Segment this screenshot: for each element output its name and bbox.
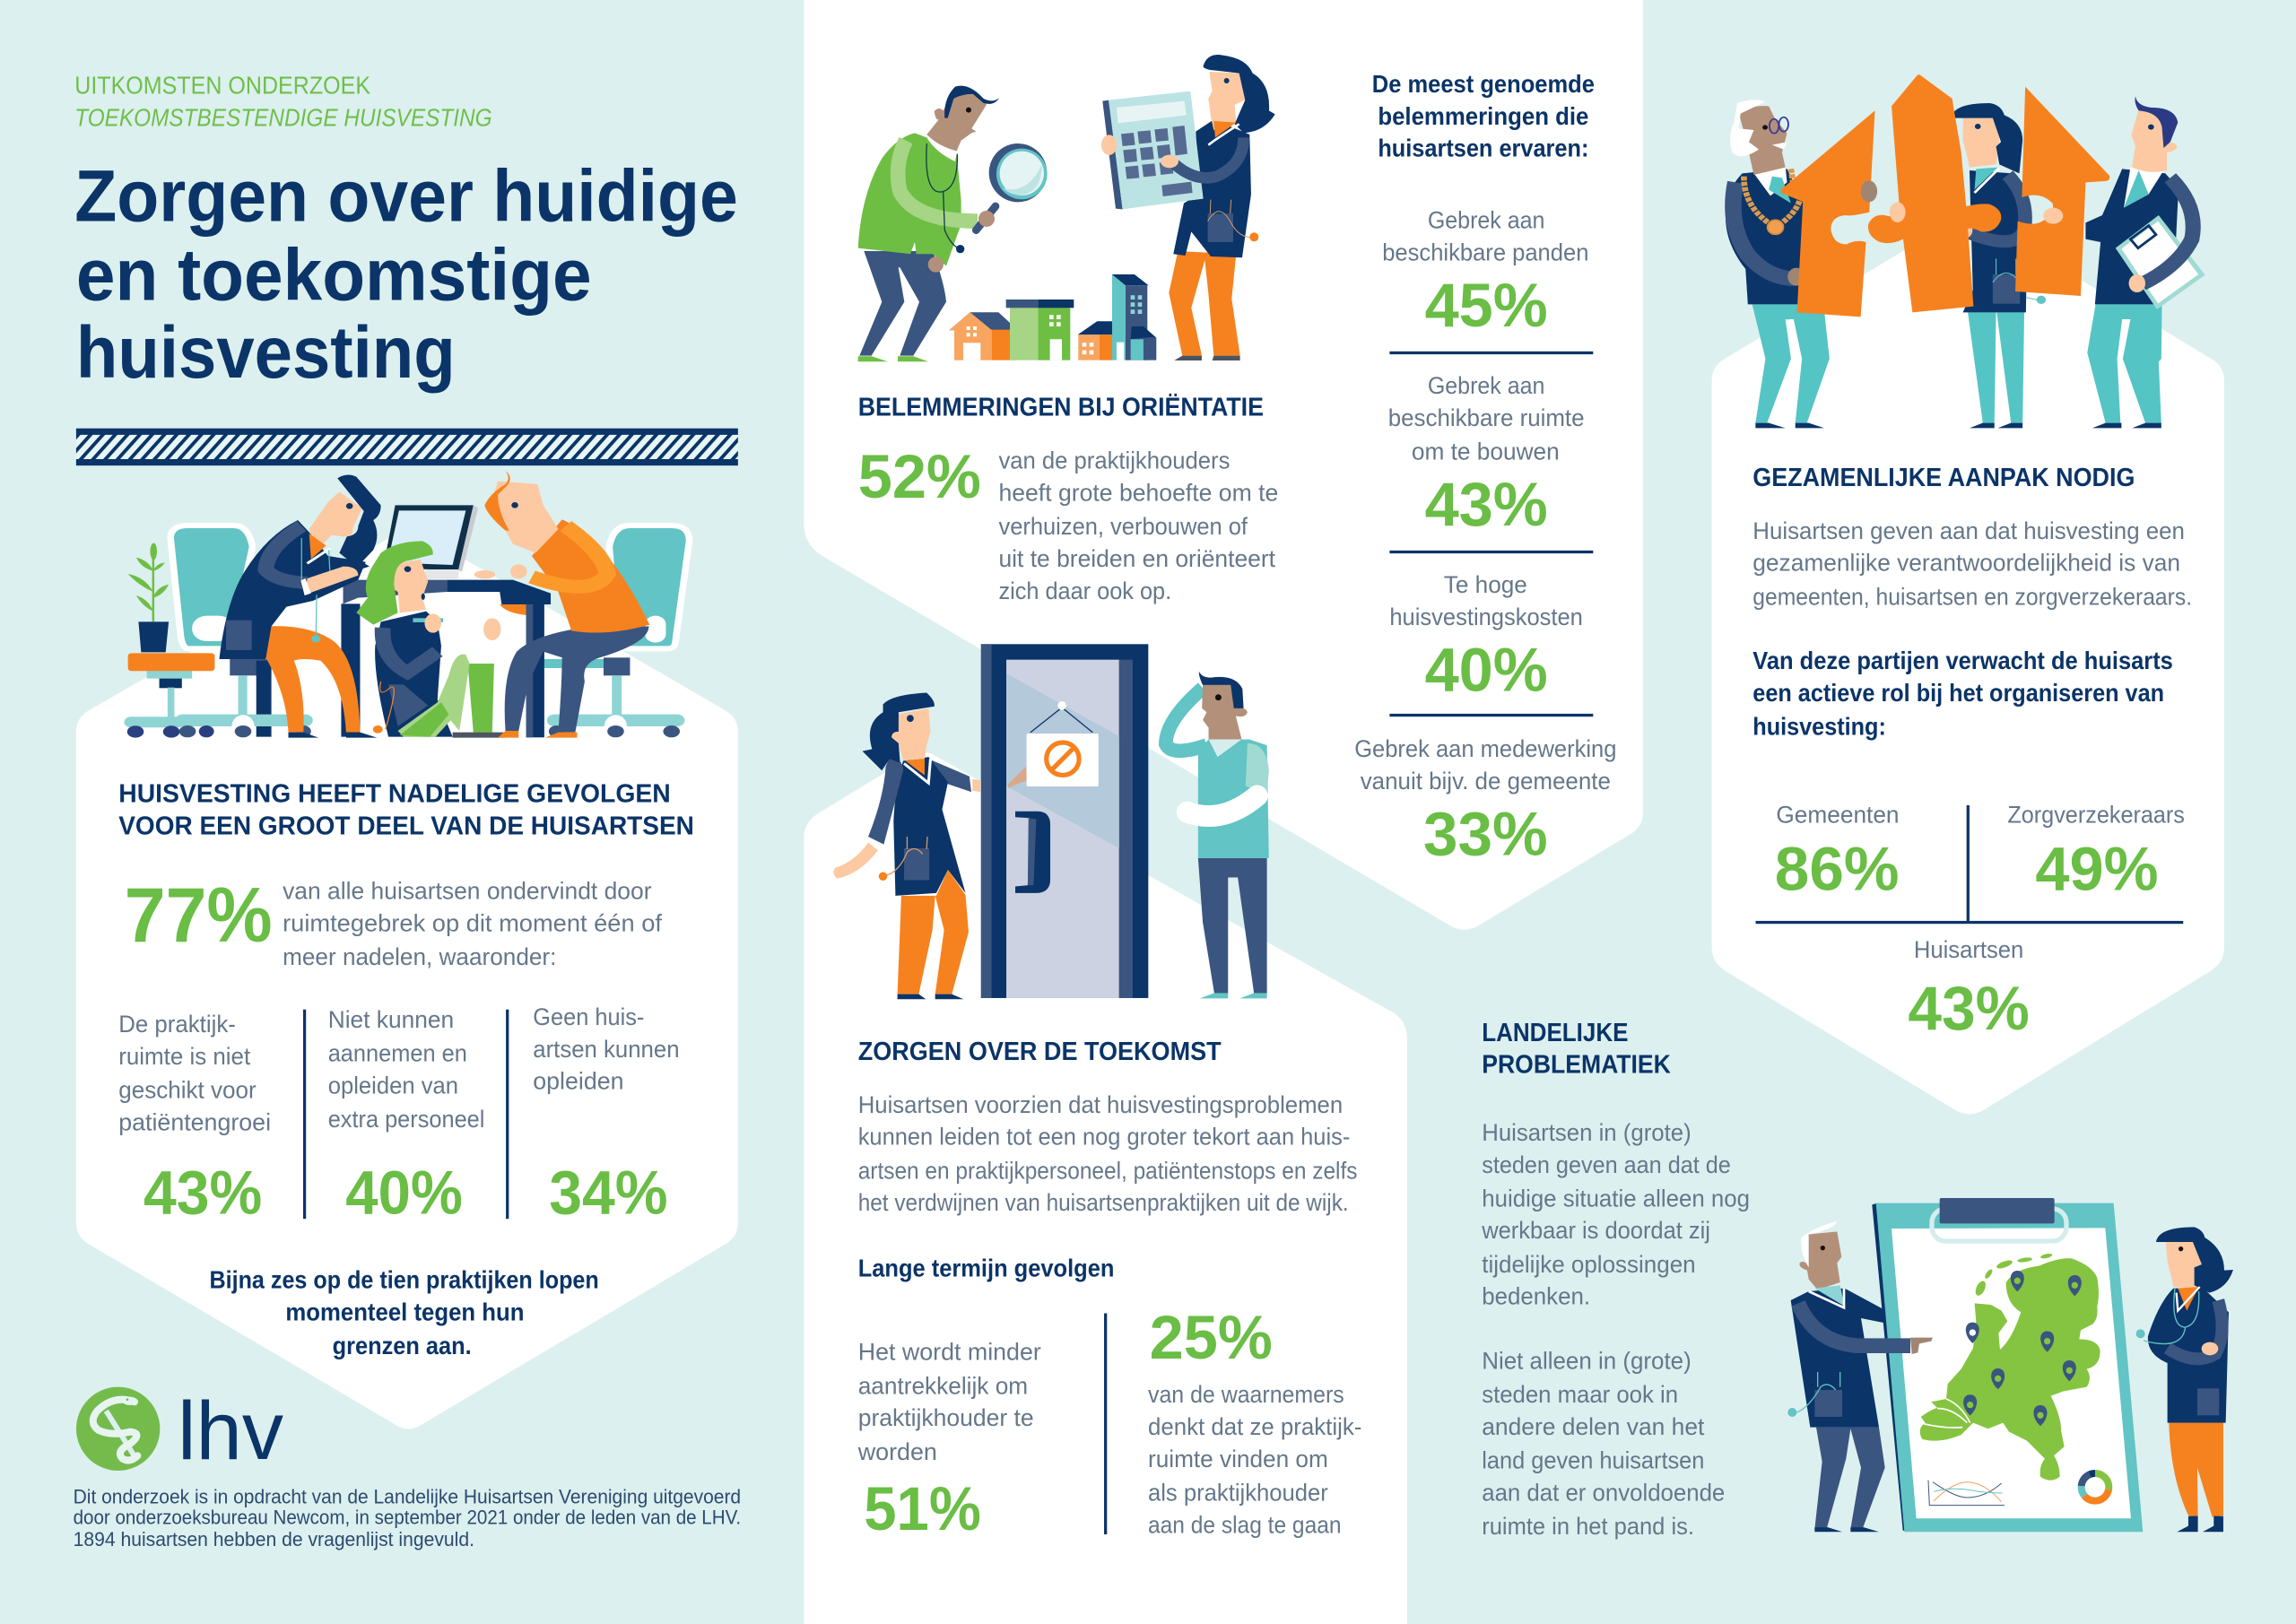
text: landelijke problematiek paragraphs: bedenken. [1482, 1283, 1590, 1310]
stat block: 51%: 51% [864, 1474, 981, 1543]
stat block: 25%: als praktijkhouder [1148, 1479, 1328, 1506]
person: man pointing at map [1787, 1221, 1933, 1532]
text: landelijke problematiek paragraphs [1481, 1119, 1750, 1540]
person: man in orange sweater [474, 471, 649, 738]
text: toekomst paragraph [858, 1091, 1357, 1216]
text: landelijke problematiek paragraphs: ruimte in het pand is. [1482, 1513, 1694, 1540]
callout: bijna zes op de tien: momenteel tegen hun [285, 1298, 524, 1326]
stat: zorgverzekeraars 49%: Zorgverzekeraars [2007, 802, 2185, 829]
title: Zorgen over huidige [74, 156, 738, 238]
column 3: opleiden: opleiden [533, 1068, 624, 1095]
text: landelijke problematiek paragraphs: steden geven aan dat de [1482, 1151, 1731, 1178]
puzzle piece left [1781, 110, 1875, 317]
callout: actieve rol: huisvesting: [1752, 713, 1886, 741]
list item: huisvestingskosten: Te hoge [1444, 571, 1527, 598]
illustration: map of the Netherlands on a clipboard [1787, 1198, 2233, 1532]
puzzle piece right [2015, 87, 2109, 296]
mini line chart [1928, 1481, 2005, 1506]
stat: 52%: 52% [858, 442, 981, 511]
heading: belemmeringen bij orientatie: BELEMMERINGEN BIJ ORIËNTATIE [858, 393, 1264, 422]
logo wordmark: lhv [178, 1385, 283, 1477]
heading: meest genoemde belemmeringen: huisartsen ervaren: [1378, 135, 1588, 162]
subheading: lange termijn gevolgen: Lange termijn gevolgen [858, 1255, 1114, 1282]
column 3: opleiden [533, 1003, 680, 1227]
list item: beschikbare ruimte: Gebrek aan [1428, 372, 1544, 399]
list item: beschikbare panden: beschikbare panden [1382, 239, 1588, 266]
title [74, 156, 738, 394]
column 1: praktijkruimte: patiëntengroei [118, 1108, 271, 1135]
footnote: 1894 huisartsen hebben de vragenlijst ingevuld. [74, 1528, 474, 1550]
text: landelijke problematiek paragraphs: huidige situatie alleen nog [1482, 1185, 1750, 1211]
text: toekomst paragraph: artsen en praktijkpersoneel, patiëntenstops en zelfs [858, 1157, 1357, 1184]
column 3: opleiden: artsen kunnen [533, 1036, 680, 1063]
text: landelijke problematiek paragraphs: land geven huisartsen [1482, 1447, 1704, 1474]
text: gezamenlijke verantwoordelijkheid [1752, 517, 2192, 610]
stat: gemeenten 86%: Gemeenten [1776, 802, 1900, 829]
person: woman with folded arms [2136, 1227, 2233, 1532]
stat block: 25%: ruimte vinden om [1148, 1446, 1328, 1472]
heading: zorgen over de toekomst: ZORGEN OVER DE TOEKOMST [858, 1038, 1222, 1066]
header: section labels: UITKOMSTEN ONDERZOEK [74, 71, 370, 99]
text: 77% description [283, 877, 662, 970]
stat: 77%: 77% [125, 873, 273, 959]
list item: beschikbare panden: 45% [1425, 271, 1548, 340]
map pins [1963, 1271, 2082, 1426]
text: gezamenlijke verantwoordelijkheid: Huisartsen geven aan dat huisvesting een [1752, 517, 2185, 544]
puzzle piece middle [1868, 74, 2001, 312]
list item: medewerking gemeente: 33% [1423, 799, 1548, 868]
heading: landelijke problematiek: PROBLEMATIEK [1482, 1051, 1671, 1080]
stat block: 25%: aan de slag te gaan [1148, 1511, 1342, 1538]
sign: no entry [1027, 734, 1099, 786]
text: gezamenlijke verantwoordelijkheid: gemeenten, huisartsen en zorgverzekeraars. [1752, 583, 2192, 610]
stat block: 51%: worden [857, 1438, 937, 1465]
clipboard [2116, 215, 2205, 309]
text: landelijke problematiek paragraphs: Huisartsen in (grote) [1482, 1119, 1692, 1146]
heading: left panel [118, 780, 694, 841]
door [981, 644, 1148, 998]
list item: huisvestingskosten: huisvestingskosten [1389, 604, 1583, 630]
stat block: 51% [857, 1339, 1041, 1543]
list item: beschikbare ruimte: 43% [1425, 470, 1548, 539]
text: 52% description: zich daar ook op. [998, 578, 1171, 604]
person: man with clipboard [2085, 96, 2205, 428]
callout: bijna zes op de tien: grenzen aan. [333, 1332, 472, 1359]
panel: centre lower white hexagon [804, 752, 1407, 1624]
panel: right white hexagon [1712, 216, 2224, 1114]
text: toekomst paragraph: Huisartsen voorzien dat huisvestingsproblemen [858, 1091, 1343, 1118]
heading: landelijke problematiek [1482, 1019, 1671, 1080]
footnote [74, 1486, 741, 1550]
heading: meest genoemde belemmeringen [1372, 70, 1595, 162]
stat: gemeenten 86% [1775, 802, 1900, 904]
text: 52% description: verhuizen, verbouwen of [998, 513, 1248, 540]
logo: lhv [76, 1385, 283, 1477]
column 1: praktijkruimte: 43% [144, 1158, 262, 1227]
text: landelijke problematiek paragraphs: werkbaar is doordat zij [1481, 1217, 1710, 1244]
list item: medewerking gemeente [1354, 735, 1616, 868]
stat block: 25%: 25% [1150, 1303, 1273, 1372]
title: en toekomstige [76, 235, 592, 317]
text: landelijke problematiek paragraphs: steden maar ook in [1482, 1381, 1678, 1408]
person: man with magnifier [858, 86, 1048, 361]
callout: bijna zes op de tien: Bijna zes op de tien praktijken lopen [209, 1266, 599, 1294]
list item: huisvestingskosten: 40% [1425, 636, 1548, 705]
column 1: praktijkruimte: De praktijk- [118, 1011, 236, 1038]
heading: meest genoemde belemmeringen: belemmeringen die [1378, 102, 1588, 130]
list item: beschikbare ruimte [1388, 372, 1593, 553]
side table with plant [124, 543, 214, 738]
person: woman with calculator [1101, 55, 1275, 360]
striped divider bar [76, 429, 738, 465]
footnote: Dit onderzoek is in opdracht van de Landelijke Huisartsen Vereniging uitgevoerd [74, 1486, 741, 1508]
text: landelijke problematiek paragraphs: tijdelijke oplossingen [1482, 1251, 1696, 1278]
text: 52% description: van de praktijkhouders [998, 447, 1230, 473]
heading: left panel: VOOR EEN GROOT DEEL VAN DE HUISARTSEN [118, 812, 694, 841]
stat: zorgverzekeraars 49% [2007, 802, 2185, 904]
illustration: magnifier doctor, houses and calculator doctor [858, 55, 1275, 361]
person: mayor with chain [1726, 100, 1830, 428]
panel: left white hexagon [76, 531, 738, 1429]
callout: bijna zes op de tien [209, 1266, 599, 1359]
illustration: three people with puzzle house [1726, 74, 2205, 428]
column 3: opleiden: Geen huis- [533, 1003, 644, 1030]
list item: beschikbare panden [1382, 207, 1593, 354]
column 1: praktijkruimte [118, 1011, 271, 1227]
map of the Netherlands [1920, 1253, 2100, 1481]
hands on puzzle [1861, 180, 2063, 224]
clipboard [1872, 1198, 2143, 1532]
person: doctor seated on the floor [356, 541, 506, 738]
desk [341, 580, 551, 737]
text: toekomst paragraph: het verdwijnen van huisartsenpraktijken uit de wijk. [858, 1189, 1349, 1216]
column 2: personeel [328, 1006, 484, 1227]
person: woman at door [833, 693, 980, 999]
heading: landelijke problematiek: LANDELIJKE [1482, 1019, 1629, 1047]
stat block: 51%: aantrekkelijk om [858, 1372, 1028, 1399]
stat: huisartsen 43%: 43% [1908, 974, 2030, 1043]
header: section labels: TOEKOMSTBESTENDIGE HUISVESTING [74, 103, 492, 131]
text: gezamenlijke verantwoordelijkheid: gezamenlijke verantwoordelijkheid is van [1752, 550, 2180, 577]
mini donut chart [2082, 1473, 2109, 1501]
panel: centre upper white shape [804, 0, 1643, 930]
monitor [383, 505, 478, 579]
chair right [544, 525, 690, 738]
stat: zorgverzekeraars 49%: 49% [2035, 835, 2159, 904]
text: landelijke problematiek paragraphs: Niet alleen in (grote) [1482, 1348, 1692, 1375]
text: 52% description: uit te breiden en oriënteert [998, 545, 1276, 572]
column 1: praktijkruimte: ruimte is niet [118, 1043, 251, 1070]
list item: beschikbare panden: Gebrek aan [1428, 207, 1544, 234]
person: doctor left [219, 475, 381, 738]
illustration: three doctors at a desk [124, 471, 690, 738]
heading: left panel: HUISVESTING HEEFT NADELIGE GEVOLGEN [118, 780, 671, 809]
callout: actieve rol: Van deze partijen verwacht de huisarts [1752, 647, 2173, 674]
person: man at door [1166, 672, 1269, 998]
stat block: 51%: Het wordt minder [858, 1339, 1041, 1366]
person: doctor behind puzzle [1952, 103, 2046, 428]
footnote: door onderzoeksbureau Newcom, in september 2021 onder de leden van de LHV. [74, 1507, 741, 1529]
stat: huisartsen 43% [1908, 936, 2030, 1043]
text: 77% description: van alle huisartsen ondervindt door [283, 877, 652, 904]
icon: green circle with snake and staff [76, 1387, 160, 1471]
column 3: opleiden: 34% [549, 1158, 667, 1227]
chair left [170, 525, 313, 738]
text: toekomst paragraph: kunnen leiden tot een nog groter tekort aan huis- [858, 1124, 1350, 1151]
list item: medewerking gemeente: vanuit bijv. de gemeente [1361, 768, 1611, 795]
callout: actieve rol [1752, 647, 2173, 741]
stat block: 25%: denkt dat ze praktijk- [1148, 1413, 1361, 1440]
column 2: personeel: 40% [345, 1158, 463, 1227]
stat block: 25%: van de waarnemers [1148, 1381, 1344, 1408]
column 2: personeel: extra personeel [328, 1106, 484, 1133]
houses [949, 274, 1156, 360]
title: huisvesting [76, 312, 456, 394]
stat: huisartsen 43%: Huisartsen [1914, 936, 2023, 963]
column 2: personeel: aannemen en [328, 1040, 467, 1067]
heading: gezamenlijke aanpak nodig: GEZAMENLIJKE AANPAK NODIG [1752, 464, 2135, 492]
column 1: praktijkruimte: geschikt voor [118, 1076, 257, 1103]
column 2: personeel: Niet kunnen [328, 1006, 454, 1033]
list item: huisvestingskosten [1389, 571, 1593, 716]
header: section labels [74, 71, 492, 131]
text: 77% description: ruimtegebrek op dit moment één of [283, 909, 662, 936]
stat: gemeenten 86%: 86% [1775, 835, 1900, 904]
text: 52% description [998, 447, 1278, 604]
text: landelijke problematiek paragraphs: andere delen van het [1482, 1413, 1705, 1440]
column 2: personeel: opleiden van [328, 1073, 458, 1099]
callout: actieve rol: een actieve rol bij het organiseren van [1752, 679, 2164, 707]
list item: beschikbare ruimte: beschikbare ruimte [1388, 404, 1585, 431]
illustration: closed door with two people [833, 644, 1269, 999]
text: 77% description: meer nadelen, waaronder: [283, 943, 556, 970]
stat block: 51%: praktijkhouder te [858, 1404, 1034, 1431]
text: 52% description: heeft grote behoefte om te [998, 479, 1278, 506]
heading: meest genoemde belemmeringen: De meest genoemde [1372, 70, 1595, 98]
list item: medewerking gemeente: Gebrek aan medewerking [1354, 735, 1616, 762]
text: landelijke problematiek paragraphs: aan dat er onvoldoende [1482, 1479, 1725, 1506]
stat block: 25% [1148, 1303, 1361, 1538]
list item: beschikbare ruimte: om te bouwen [1412, 439, 1560, 465]
